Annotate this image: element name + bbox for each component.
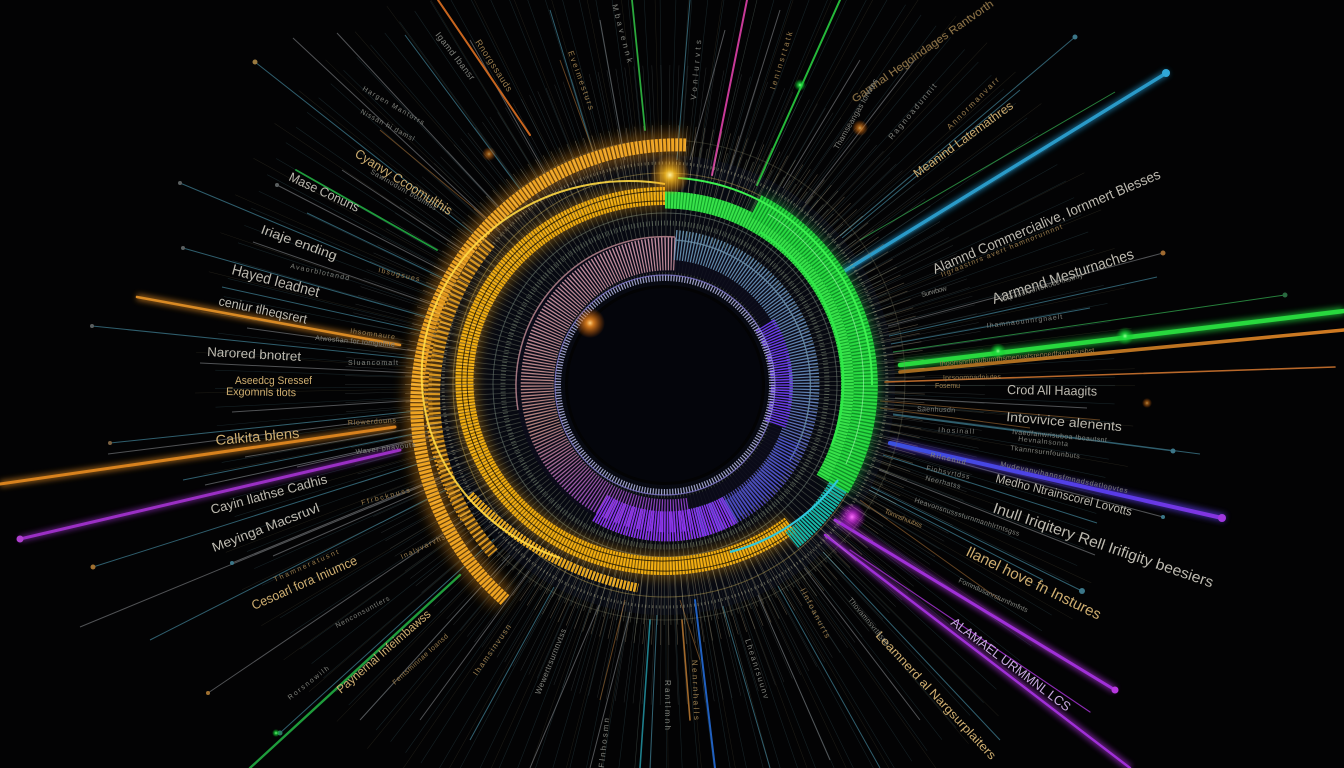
ring: green arc bbox=[665, 178, 872, 487]
centre void bbox=[568, 288, 762, 482]
tiny labels: right: Ilgraastnrs avert hamnoruinnnt bbox=[940, 224, 1063, 279]
tiny labels: top: Ragnoadunnit bbox=[887, 81, 939, 141]
tiny labels: right: Tomnshuubss bbox=[883, 508, 923, 530]
tiny labels: right: Surwbow bbox=[921, 285, 949, 299]
ray: orange left long bbox=[0, 427, 395, 484]
tiny labels: right: Ihoorrsnrtnaubumthsmenuatsrenoedfaonhsusbst bbox=[940, 348, 1095, 368]
label: Paynernal Infeimbawss bbox=[334, 607, 434, 696]
ray end: purple dots bbox=[16, 69, 1226, 694]
label: Gamnal Hegoindages Rantvorth bbox=[850, 0, 996, 105]
green bright edge bbox=[678, 178, 872, 385]
ray: orange left upper bbox=[137, 297, 400, 345]
ray: orange top bbox=[438, 0, 530, 135]
tiny labels: right: Fosemu bbox=[935, 383, 960, 390]
ray: blue bottom bbox=[695, 600, 715, 768]
ring: violet highlights bbox=[600, 325, 790, 526]
thin guide rings bbox=[425, 140, 905, 620]
ring: steel blue band bbox=[675, 240, 810, 524]
tiny labels: left: Sawinodunt bouilnss bbox=[369, 169, 438, 212]
green outer band bbox=[756, 206, 866, 487]
tiny labels: top: Rnorgssauds bbox=[473, 38, 515, 94]
ring: green arc glow bbox=[756, 206, 866, 487]
tiny labels: bottom bbox=[287, 587, 890, 768]
tiny labels: right: Neerhatss bbox=[925, 475, 962, 491]
tiny labels: top: Annormanvarr bbox=[945, 75, 1001, 131]
tiny labels: right: Hevnalnsonta bbox=[1018, 436, 1068, 448]
tiny labels: left: Rlowerdouns bbox=[348, 417, 397, 427]
tiny labels: left: Inalyvarvhs bbox=[400, 534, 447, 561]
label: Cayin Ilathse Cadhis bbox=[209, 471, 329, 517]
tiny labels: bottom: Wewertrsurnnvtss bbox=[534, 627, 568, 696]
tiny labels: left: Fentsminnae Ioansd bbox=[392, 633, 450, 686]
label: Meanind Latemathres bbox=[911, 99, 1016, 180]
tiny labels: top: Mbavennk bbox=[610, 3, 635, 64]
tiny labels: top: Eveimesturs bbox=[566, 50, 596, 111]
label: Narored bnotret bbox=[207, 344, 302, 364]
tiny labels: right: Tkannrsurnfounbuts bbox=[1010, 445, 1081, 461]
label: Crod All Haagits bbox=[1007, 382, 1098, 399]
tiny labels: left: Hargen Mantorrs bbox=[361, 86, 426, 127]
arc: second orange bbox=[434, 243, 493, 553]
tiny labels: bottom: Rorsnowilh bbox=[287, 665, 331, 702]
ray: orange right thin bbox=[885, 367, 1335, 382]
tiny labels: top: Igamd Ibansr bbox=[433, 30, 477, 82]
ray: green top bbox=[632, 0, 645, 130]
ray: purple bottom right bbox=[825, 535, 1130, 768]
tiny labels: left: Nissan hi damsl bbox=[359, 109, 416, 143]
label: Ilanel hove fn Instures bbox=[963, 543, 1104, 623]
label: Cyanvy Ccoomulthis bbox=[352, 146, 456, 218]
tiny labels: top: Thamseangas Iorwtes bbox=[832, 77, 880, 151]
label: Aseedcg Sressef bbox=[235, 375, 313, 387]
labels: left side bbox=[207, 146, 456, 696]
ray: green upper left bbox=[296, 170, 437, 250]
tiny labels: right: Mudevanvihannsfmnadsdatlopvtes bbox=[1000, 461, 1129, 495]
tiny labels: bottom: Ilnfoanurts bbox=[798, 587, 832, 640]
label: Medho Ntrainscorel Lovotts bbox=[994, 471, 1134, 519]
label: Mase Conuns bbox=[287, 169, 362, 215]
gold ring crossing lines bbox=[440, 160, 890, 610]
tiny labels: right: Heavonsnusssturnmanhlrtntsgss bbox=[913, 497, 1021, 538]
ring: outer orange arcs bbox=[417, 145, 686, 600]
gold ring glow bbox=[417, 145, 790, 600]
label: Exgomnls tlots bbox=[226, 386, 297, 399]
arc: lower orange band bbox=[470, 495, 638, 588]
tiny labels: right: Ihamnaounnrgnaelt bbox=[986, 314, 1063, 330]
ring: pink band bbox=[516, 237, 690, 516]
glow spots bbox=[272, 79, 1152, 737]
tiny labels: left: Thamneratusnt bbox=[273, 549, 340, 584]
tiny labels: left: Ffrbcknuss bbox=[361, 487, 411, 507]
tiny labels: top: Vonlurvts bbox=[689, 40, 703, 100]
ray: green top right bbox=[757, 0, 840, 185]
tiny labels: bottom: Nenrnhalls bbox=[690, 660, 701, 720]
tiny labels: bottom: Ihamsinvusn bbox=[471, 623, 513, 677]
label: Cesoarl fora Iniumce bbox=[249, 553, 359, 613]
ray: green right bbox=[900, 311, 1344, 365]
ray: magenta thin lower right bbox=[850, 550, 1090, 712]
ring: inner dark backing bbox=[534, 254, 796, 516]
ray: blue upper right bbox=[838, 72, 1168, 275]
label: Inull Iriqitery Rell Irifigity beesiers bbox=[991, 500, 1216, 591]
tiny labels: right: Ivaedfanwrisuboa Iboautsnt bbox=[1012, 429, 1107, 444]
tiny labels: right: Fiohsvrtdss bbox=[926, 465, 971, 481]
tiny labels: right bbox=[883, 224, 1129, 615]
ray: purple lower right bbox=[835, 520, 1115, 690]
ray: violet right bbox=[890, 443, 1222, 518]
ray: green lower left bbox=[250, 575, 460, 768]
ray: orange right wide bbox=[900, 330, 1344, 372]
tiny labels: left: Ihsomnaure bbox=[350, 328, 395, 341]
label: Alamnd Commercialive, Iornmert Blesses bbox=[930, 166, 1163, 277]
tiny labels: left: Nenconsuntlers bbox=[335, 595, 391, 630]
tiny labels: bottom: Thovamnsvrthsnn bbox=[846, 597, 890, 647]
tiny labels: bottom: Flnhosmn bbox=[597, 718, 611, 768]
ring: inner white ticks bbox=[555, 275, 775, 495]
label: Meyinga Macsruvl bbox=[210, 500, 322, 555]
tiny labels: right: Saenhusdn bbox=[917, 406, 955, 414]
label: Intovivice alenents bbox=[1006, 409, 1123, 434]
tiny labels bbox=[273, 3, 1129, 768]
tiny labels: left: Atwosfian for Iomgoflite bbox=[315, 335, 395, 349]
label: Hayed Ieadnet bbox=[230, 261, 322, 301]
tiny labels: left: Waver phavouts bbox=[355, 442, 416, 456]
label: Calkita blens bbox=[215, 425, 300, 448]
label: Leamnerd al Nargsurplaiters bbox=[873, 628, 999, 762]
label: ceniur tlheqsrert bbox=[217, 293, 309, 327]
tiny labels: bottom: Rantlmnh bbox=[663, 680, 672, 730]
tiny labels: right: Iprsoomnadniutes bbox=[943, 374, 1002, 382]
label: ALAMAEL URMMNL LCS bbox=[948, 614, 1074, 714]
tiny labels: top: Ieninsrtatk bbox=[768, 30, 795, 91]
green inner band bbox=[665, 200, 850, 479]
tiny labels: right: Impoudiuertenoss lnsthly bbox=[1001, 272, 1084, 304]
arc: outermost orange bbox=[417, 145, 686, 600]
tiny labels: left: Ibsugsues bbox=[378, 267, 421, 284]
tiny labels: right: Ihosinall bbox=[938, 427, 975, 436]
tiny labels: right: Fomndusanrsturnhmfnts bbox=[957, 577, 1029, 615]
ray: purple left bbox=[20, 450, 400, 539]
ray: orange small bottom bbox=[682, 620, 690, 720]
label: Iriaje ending bbox=[259, 222, 339, 263]
tiny labels: left: Sluancomalt bbox=[348, 360, 398, 367]
ray: teal bottom bbox=[640, 620, 650, 768]
fine spoke texture bbox=[325, 45, 1005, 725]
tiny labels: left: Avaorblotandd bbox=[290, 263, 350, 282]
ring: cyan arc bbox=[730, 480, 838, 552]
ray: magenta top bbox=[712, 0, 747, 175]
ring: yellow arc bbox=[422, 181, 794, 571]
tiny labels: left bbox=[273, 86, 450, 686]
tiny labels: right: Rilnenud bbox=[930, 452, 966, 466]
labels: right side bbox=[850, 0, 1216, 762]
tiny labels: bottom: Lheanrsuunv bbox=[743, 638, 771, 700]
tiny labels: top bbox=[433, 3, 1001, 151]
label: Aarmend Mesturnaches bbox=[990, 246, 1136, 308]
